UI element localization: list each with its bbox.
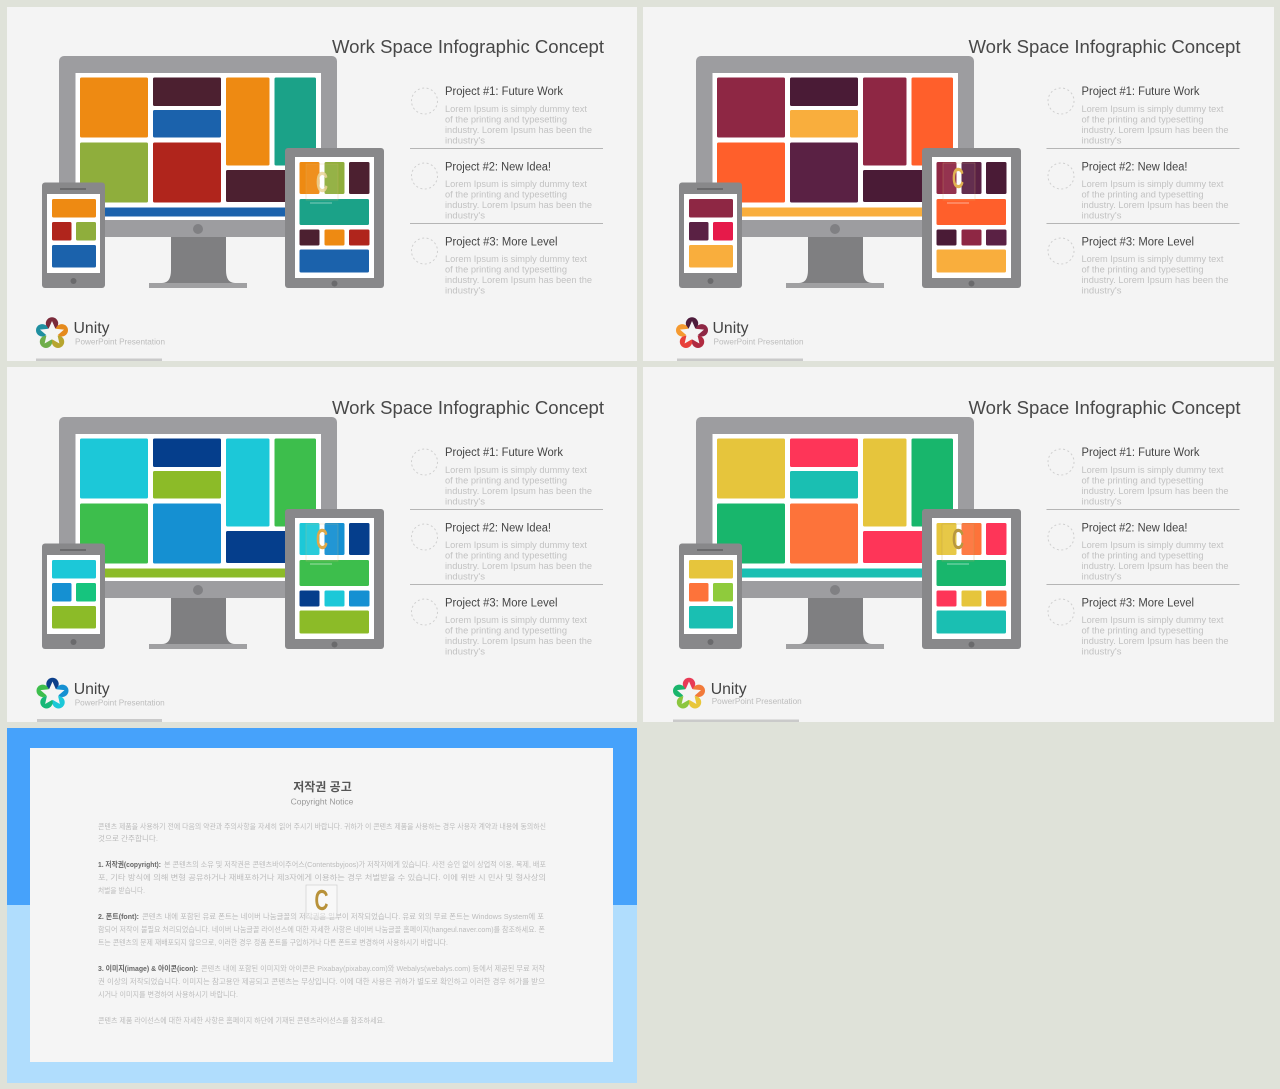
project 3: Project #3: More Level (1082, 598, 1194, 610)
text block: font clause: 콘텐츠 내에 포함된 유료 폰트는 네이버 나눔글꼴의 저작권을 일부이 저작되었습니다. 유료 외의 무료 폰트는 Windows System에 포 (142, 911, 544, 921)
title: Work Space Infographic Concept (332, 398, 604, 418)
icon: desktop monitor (59, 417, 337, 649)
icon: tablet (922, 148, 1021, 288)
project 3: industry's (1082, 286, 1122, 296)
project 3: industry. Lorem Ipsum has been the (445, 275, 592, 285)
project 3: Project #3: More Level (445, 236, 558, 248)
watermark: C (314, 885, 329, 917)
project 1: Lorem Ipsum is simply dummy text (1082, 104, 1224, 114)
project 1: Project #1: Future Work (445, 86, 563, 98)
watermark (943, 163, 975, 204)
watermark (306, 164, 338, 204)
project 2: Lorem Ipsum is simply dummy text (445, 540, 587, 550)
project 1: Lorem Ipsum is simply dummy text (445, 465, 587, 475)
text block: copyright clause (98, 859, 546, 895)
project 3: Lorem Ipsum is simply dummy text (445, 254, 587, 264)
heading: copyright notice: 저작권 공고 (293, 779, 352, 794)
logo: Unity (676, 317, 804, 348)
text block: intro: 콘텐츠 제품을 사용하기 전에 다음의 약관과 주의사항을 자세히 읽어 주시기 바랍니다. 귀하가 이 콘텐츠 제품을 사용하는 경우 사용자 계약과 내용에 동의하신 (98, 821, 546, 831)
logo: Unity: PowerPoint Presentation (75, 336, 165, 346)
panel: slide 1 orange theme (7, 7, 637, 361)
heading: copyright notice (291, 779, 354, 806)
logo: Unity: PowerPoint Presentation (75, 698, 165, 708)
project 2: Project #2: New Idea! (445, 162, 551, 174)
logo: Unity: Unity (711, 681, 747, 698)
icon: desktop monitor (696, 56, 974, 288)
project 1: Lorem Ipsum is simply dummy text (445, 104, 587, 114)
project 1: industry's (445, 136, 486, 146)
watermark: C (952, 163, 964, 195)
text block: font clause: 트는 콘텐츠의 문제 재배포되지 않으므로, 이러한 경우 정품 폰트를 구입하거나 다른 폰트로 변경하여 사용하시기 바랍니다. (98, 937, 448, 947)
project 2: industry's (1082, 210, 1122, 220)
logo: Unity: PowerPoint Presentation (712, 696, 802, 706)
project 2: Lorem Ipsum is simply dummy text (445, 179, 587, 189)
logo: Unity (36, 678, 165, 708)
project 3: of the printing and typesetting (445, 626, 567, 636)
project 2: industry. Lorem Ipsum has been the (445, 200, 592, 210)
project 2: of the printing and typesetting (445, 550, 567, 560)
project 2: industry. Lorem Ipsum has been the (445, 561, 592, 571)
project 3: industry's (445, 646, 486, 656)
project 1 (1048, 86, 1228, 146)
project 1: of the printing and typesetting (1082, 114, 1204, 124)
project 3 (412, 598, 592, 656)
project 2: industry's (1082, 572, 1122, 582)
icon: tablet (922, 509, 1021, 649)
project 3: industry. Lorem Ipsum has been the (1082, 275, 1228, 285)
project 3: Project #3: More Level (1082, 236, 1194, 248)
icon: phone (42, 544, 105, 649)
icon: phone (679, 544, 742, 649)
watermark (942, 524, 974, 564)
project 1: of the printing and typesetting (445, 114, 567, 124)
project 1: Project #1: Future Work (1082, 86, 1200, 98)
project 3: of the printing and typesetting (1082, 626, 1204, 636)
project 3 (412, 236, 592, 296)
project 2 (1048, 162, 1228, 220)
text block: image and icon clause: 시거나 이미지를 변경하여 사용하시기 바랍니다. (98, 989, 238, 999)
text block: image and icon clause: 콘텐츠 내에 포함된 이미지와 아이콘은 Pixabay(pixabay.com)와 Webalys(webalys.com) 등에서 제공된 무료 저작 (201, 963, 545, 973)
project 2: industry's (445, 572, 486, 582)
project 1: industry. Lorem Ipsum has been the (1082, 125, 1228, 135)
icon: desktop monitor (696, 417, 974, 649)
project 1: of the printing and typesetting (445, 476, 567, 486)
project 3: of the printing and typesetting (1082, 264, 1204, 274)
project 2: Lorem Ipsum is simply dummy text (1082, 540, 1224, 550)
logo: Unity: Unity (712, 320, 748, 337)
panel: slide 2 crimson theme (643, 7, 1274, 361)
project 2: industry. Lorem Ipsum has been the (1082, 561, 1228, 571)
project 2 (412, 522, 592, 582)
panel: slide 4 yellow theme (643, 367, 1274, 722)
project 2 (1048, 522, 1228, 582)
project 1: industry's (1082, 136, 1122, 146)
heading: copyright notice: Copyright Notice (291, 796, 354, 806)
project 2: industry. Lorem Ipsum has been the (1082, 200, 1228, 210)
project 3: of the printing and typesetting (445, 264, 567, 274)
text block: license note: 콘텐츠 제품 라이선스에 대한 자세한 사항은 홈페이지 하단에 기재된 콘텐츠라이선스를 참조하세요. (98, 1015, 385, 1025)
project 1: industry. Lorem Ipsum has been the (445, 125, 592, 135)
project 2: Lorem Ipsum is simply dummy text (1082, 179, 1224, 189)
text block: copyright clause: 1. 저작권(copyright): (98, 859, 161, 869)
text block: image and icon clause (98, 963, 545, 999)
panel: slide 3 cyan theme (7, 367, 637, 722)
watermark: C (316, 524, 328, 556)
project 2: of the printing and typesetting (1082, 190, 1204, 200)
text block: intro: 것으로 간주합니다. (98, 833, 158, 843)
project 3: industry. Lorem Ipsum has been the (1082, 636, 1228, 646)
icon: phone (679, 182, 742, 288)
icon: phone (42, 182, 105, 288)
project 2: Project #2: New Idea! (445, 522, 551, 534)
text block: image and icon clause: 권 이상의 저작되었습니다. 이미지는 참고용만 제공되고 콘텐츠는 무상입니다. 이에 대한 사용은 귀하가 별도로 확인하고 이러한 경우 허가를 받으 (98, 976, 545, 986)
project 3: industry. Lorem Ipsum has been the (445, 636, 592, 646)
project 1 (412, 86, 592, 146)
project 2: Project #2: New Idea! (1082, 522, 1188, 534)
icon: tablet (285, 148, 384, 288)
text block: copyright clause: 본 콘텐츠의 소유 및 저작권은 콘텐츠바이주어스(Contentsbyjoos)가 저작자에게 있습니다. 사전 승인 없이 상업적 이용, 복제, 배포 (164, 859, 546, 869)
text block: image and icon clause: 3. 이미지(image) & 아이콘(icon): (98, 963, 198, 973)
icon: desktop monitor (59, 56, 337, 288)
text block: font clause (98, 911, 545, 947)
panel: copyright notice slide (7, 728, 637, 1083)
project 2: of the printing and typesetting (445, 190, 567, 200)
watermark (306, 885, 337, 918)
text block: copyright clause: 처벌을 받습니다. (98, 885, 145, 895)
logo: Unity (36, 317, 165, 348)
text block: copyright clause: 포, 기타 방식에 의해 변형 공유하거나 재배포하거나 제3자에게 이용하는 경우 처벌받을 수 있습니다. 이에 위반 시 민사 및 형사상의 (98, 872, 546, 882)
project 1: industry's (445, 496, 486, 506)
text block: font clause: 함되어 저작이 불필요 처리되었습니다. 네이버 나눔글꼴 라이선스에 대한 자세한 사항은 네이버 나눔글꼴 홈페이지(hangeul.naver.com)를 참조하세요. 폰 (98, 924, 545, 934)
project 3 (1048, 598, 1228, 656)
project 2: of the printing and typesetting (1082, 550, 1204, 560)
watermark (306, 524, 338, 564)
project 1 (412, 447, 592, 506)
watermark: C (316, 167, 328, 199)
logo: Unity: Unity (74, 681, 110, 698)
project 3: industry's (445, 286, 486, 296)
text block: font clause: 2. 폰트(font): (98, 912, 139, 921)
project 1 (1048, 447, 1228, 506)
project 2 (412, 162, 592, 220)
project 1: Project #1: Future Work (1082, 447, 1200, 459)
project 1: Lorem Ipsum is simply dummy text (1082, 465, 1224, 475)
project 1: Project #1: Future Work (445, 447, 563, 459)
title: Work Space Infographic Concept (332, 37, 604, 57)
logo: Unity: Unity (74, 320, 110, 337)
project 1: of the printing and typesetting (1082, 476, 1204, 486)
project 2: Project #2: New Idea! (1082, 162, 1188, 174)
project 3: Lorem Ipsum is simply dummy text (1082, 615, 1224, 625)
title: Work Space Infographic Concept (968, 37, 1240, 57)
icon: tablet (285, 509, 384, 649)
project 1: industry. Lorem Ipsum has been the (445, 486, 592, 496)
logo: Unity: PowerPoint Presentation (714, 336, 804, 346)
project 3: industry's (1082, 646, 1122, 656)
title: Work Space Infographic Concept (968, 398, 1240, 418)
project 3: Project #3: More Level (445, 598, 558, 610)
project 3: Lorem Ipsum is simply dummy text (1082, 254, 1224, 264)
text block: intro (98, 821, 546, 843)
watermark: C (952, 524, 964, 556)
project 1: industry's (1082, 496, 1122, 506)
logo: Unity (673, 678, 802, 708)
project 2: industry's (445, 210, 486, 220)
project 3 (1048, 236, 1228, 296)
project 3: Lorem Ipsum is simply dummy text (445, 615, 587, 625)
project 1: industry. Lorem Ipsum has been the (1082, 486, 1228, 496)
